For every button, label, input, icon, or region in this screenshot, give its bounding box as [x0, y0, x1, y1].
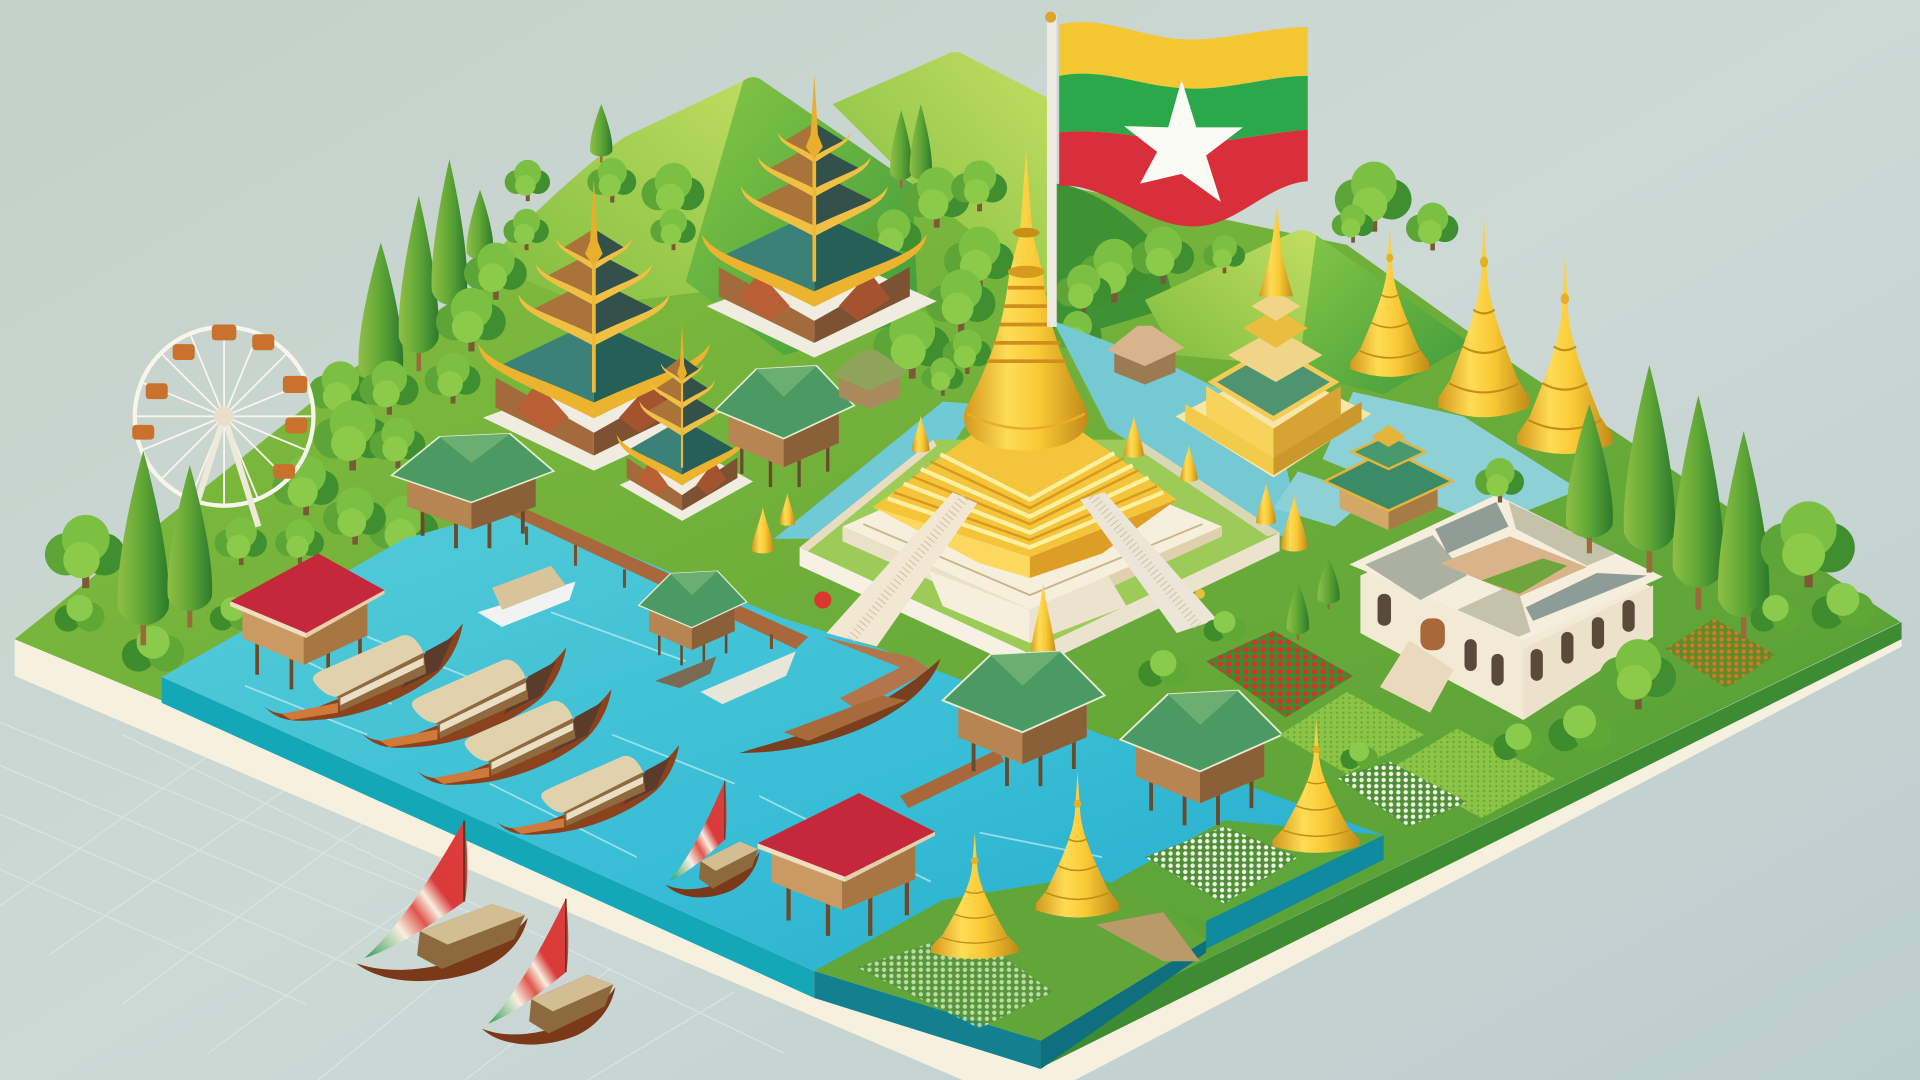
trees back-right: [1053, 162, 1458, 356]
foreground right trees: [1138, 365, 1874, 769]
farm fields: [1206, 618, 1776, 827]
ground: [15, 184, 1900, 1041]
golden temple: [1176, 206, 1371, 478]
trees back-left: [45, 104, 1014, 672]
stilt houses: [230, 434, 1282, 936]
monastery temple 2: [478, 179, 720, 471]
ferris wheel: [132, 324, 313, 527]
brown hut by channel: [831, 350, 909, 409]
flag pole: [1047, 15, 1057, 327]
front garden plot: [814, 820, 1384, 1069]
boats: [264, 566, 940, 835]
front golden stupas: [931, 720, 1360, 959]
dock and overwater boardwalks: [504, 508, 1004, 808]
main pagoda platform: [800, 440, 1280, 673]
water: [162, 321, 1580, 998]
row of golden stupas: [1350, 218, 1613, 454]
floor water grid: [0, 722, 784, 1080]
sail boats: [356, 781, 760, 1045]
myanmar flag: [1045, 12, 1308, 227]
white flower bed: [1145, 827, 1298, 904]
main shwedagon pagoda: [827, 149, 1222, 647]
small shrine spires: [752, 415, 1308, 667]
foreground cypress left: [118, 451, 212, 645]
monastery temple 1: [702, 75, 937, 358]
monastery temple 3: [617, 323, 753, 521]
colonial mansion: [1349, 495, 1663, 720]
platform base: [15, 622, 1902, 1080]
green hall near channel: [715, 366, 854, 487]
hills: [485, 52, 1469, 394]
small green pagoda: [1325, 425, 1452, 530]
small hut: [1107, 326, 1184, 384]
